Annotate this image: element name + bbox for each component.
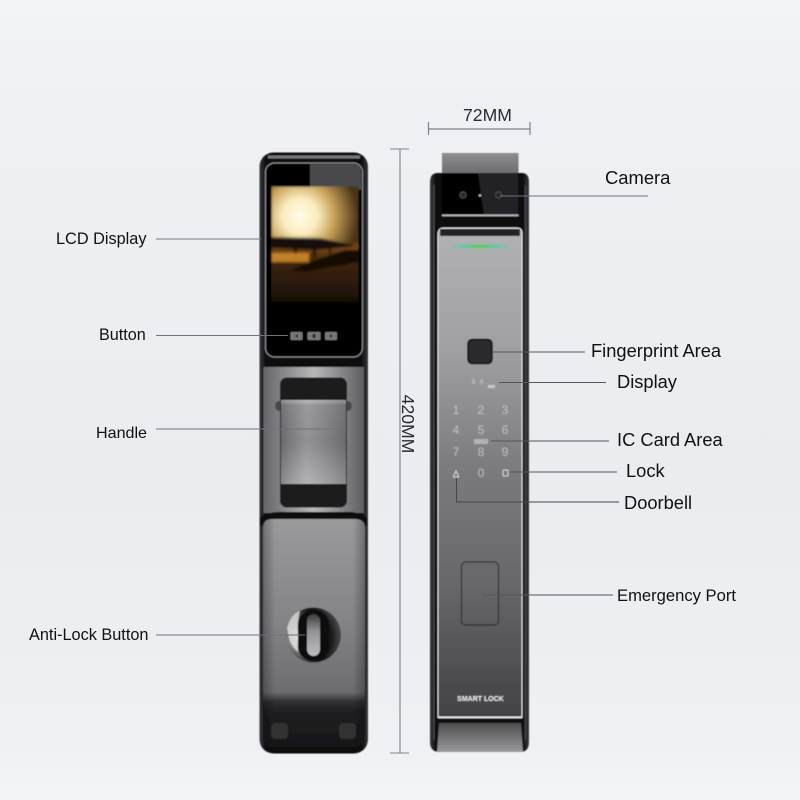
label: IC Card Area: IC Card Area (617, 429, 724, 450)
keypad: 5 (478, 423, 485, 437)
screen buttons (290, 332, 337, 340)
label: Emergency Port: Emergency Port (617, 586, 736, 605)
dimension: width: 72MM (463, 105, 512, 125)
lock icon (503, 470, 508, 476)
keypad (453, 403, 509, 480)
label: Doorbell: Doorbell (624, 492, 692, 513)
camera block (442, 173, 518, 216)
doorbell icon (454, 471, 458, 477)
keypad: 3 (502, 403, 509, 417)
keypad: 1 (453, 403, 460, 417)
keypad: 6 (502, 423, 509, 437)
label: Handle: Handle (96, 424, 147, 442)
screen photo (271, 186, 359, 314)
label: Lock: Lock (626, 460, 665, 481)
label: Anti-Lock Button: Anti-Lock Button (29, 626, 148, 644)
lock body (430, 173, 529, 752)
label: Doorbell (456, 478, 692, 513)
base (437, 723, 523, 752)
panel: side lock with keypad (430, 153, 529, 752)
IC card mark (474, 439, 488, 444)
top highlight (268, 156, 360, 158)
side highlights (434, 185, 526, 740)
label: Display: Display (617, 371, 678, 392)
lower plate (263, 519, 365, 747)
status LED (449, 244, 511, 248)
screen (266, 163, 362, 357)
keypad plate (438, 228, 522, 717)
handle plate (264, 367, 364, 513)
keypad: 0 (478, 466, 485, 480)
brand text: SMART LOCK (457, 696, 504, 703)
label: Camera: Camera (605, 167, 671, 188)
keypad: 7 (453, 445, 460, 459)
camera top (442, 153, 518, 175)
keypad: 8 (478, 445, 485, 459)
display (472, 379, 495, 388)
lock body (260, 152, 368, 754)
dimension: width (428, 105, 530, 135)
lower plate separator (260, 512, 367, 526)
feet (271, 723, 288, 739)
panel: front lock with screen (260, 152, 368, 754)
label: LCD Display: LCD Display (56, 230, 147, 248)
dimension: height: 420MM (398, 395, 418, 453)
label: Fingerprint Area: Fingerprint Area (591, 340, 722, 361)
emergency port (462, 562, 498, 625)
handle (275, 378, 352, 508)
keypad: 4 (453, 423, 460, 437)
knob (286, 608, 341, 662)
fingerprint sensor (468, 340, 492, 364)
label: Button: Button (99, 326, 146, 344)
keypad: 2 (478, 403, 485, 417)
dimension: height (390, 149, 418, 753)
keypad: 9 (502, 445, 509, 459)
